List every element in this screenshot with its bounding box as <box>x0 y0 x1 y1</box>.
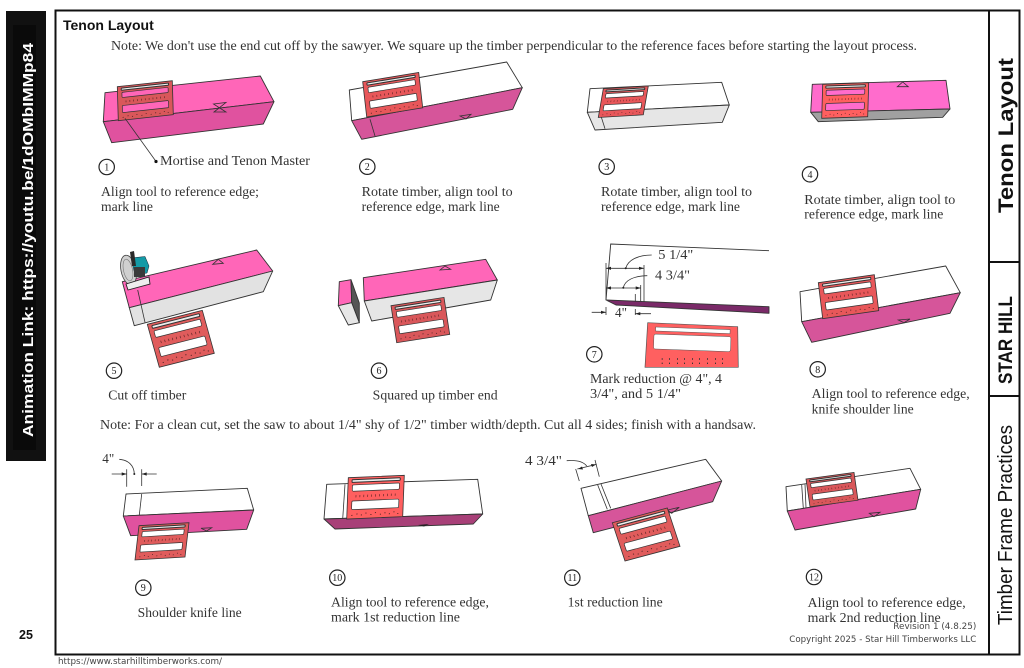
icon: circular saw <box>118 251 150 290</box>
step 4: 4 <box>808 170 812 181</box>
step 11: 4 3/4" <box>525 453 562 468</box>
step 10 <box>324 475 489 624</box>
tool close-up <box>645 323 738 367</box>
step 1: Align tool to reference edge; <box>101 184 259 199</box>
step 8: Align tool to reference edge, <box>812 386 970 401</box>
step 4: reference edge, mark line <box>804 206 943 222</box>
page number: 25 <box>19 628 33 642</box>
step 2: Rotate timber, align tool to <box>362 184 513 199</box>
step 3: Rotate timber, align tool to <box>601 184 752 199</box>
right title strip: STAR HILL <box>996 296 1017 384</box>
step 11: 11 <box>567 573 577 584</box>
step 2: 2 <box>365 162 370 173</box>
step 9: 9 <box>141 583 146 594</box>
note: clean cut: Note: For a clean cut, set the saw to about 1/4" shy of 1/2" timber width/depth. Cut all 4 sides; finish with a handsaw. <box>100 417 756 432</box>
sidebar: animation link: Animation Link: https://youtu.be/1dOMbIMMp84 <box>20 42 37 437</box>
step 8: 8 <box>815 365 820 376</box>
step 12: Align tool to reference edge, <box>808 595 966 610</box>
step 3 <box>587 82 752 214</box>
step 12: 12 <box>809 572 819 584</box>
step 10: Align tool to reference edge, <box>331 594 489 610</box>
step 6: Squared up timber end <box>373 388 498 402</box>
step 3: 3 <box>604 162 609 173</box>
step 4: Rotate timber, align tool to <box>804 192 956 207</box>
revision note: Revision 1 (4.8.25) <box>893 622 976 632</box>
step 7: Mark reduction @ 4", 4 <box>590 371 722 386</box>
step 12: mark 2nd reduction line <box>808 610 941 625</box>
step 6: 6 <box>376 366 382 377</box>
step 1 <box>99 76 311 214</box>
step 5: 5 <box>112 366 116 377</box>
step 2 <box>349 62 522 214</box>
step 10: 10 <box>332 573 342 584</box>
step 3: reference edge, mark line <box>601 199 740 214</box>
step 2: reference edge, mark line <box>362 199 500 214</box>
step 4 <box>802 80 956 222</box>
step 11: 1st reduction line <box>568 594 663 610</box>
step 5 <box>106 250 273 402</box>
step 12 <box>786 468 966 625</box>
step 9: 4" <box>102 451 114 466</box>
right title strip: Tenon Layout <box>995 58 1018 213</box>
step 1: 1 <box>104 162 109 174</box>
right title strip <box>989 10 1020 654</box>
step 7: 7 <box>592 350 597 361</box>
sidebar: animation link <box>6 11 46 461</box>
right title strip: Timber Frame Practices <box>995 425 1017 625</box>
step 10: mark 1st reduction line <box>331 610 460 624</box>
step 1: mark line <box>101 199 153 214</box>
step 8 <box>800 266 970 416</box>
step 9: Shoulder knife line <box>138 605 242 620</box>
note: end cut: Note: We don't use the end cut off by the sawyer. We square up the timber perpendicular to the reference faces before starting the layout process. <box>111 38 917 53</box>
step 11 <box>525 453 722 610</box>
step 7: 4" <box>615 305 627 320</box>
step 7: 5 1/4" <box>658 247 693 262</box>
step 6 <box>338 259 498 402</box>
copyright: Copyright 2025 - Star Hill Timberworks LLC <box>789 635 976 645</box>
step 9 <box>102 451 254 620</box>
step 7 <box>587 244 769 401</box>
website url: https://www.starhilltimberworks.com/ <box>58 657 223 667</box>
step 5: Cut off timber <box>108 388 187 402</box>
step 1: Mortise and Tenon Master <box>160 153 311 168</box>
heading: Tenon Layout <box>63 17 154 33</box>
step 7: 4 3/4" <box>655 268 690 282</box>
step 8: knife shoulder line <box>812 402 914 416</box>
step 7: 3/4", and 5 1/4" <box>590 386 681 401</box>
